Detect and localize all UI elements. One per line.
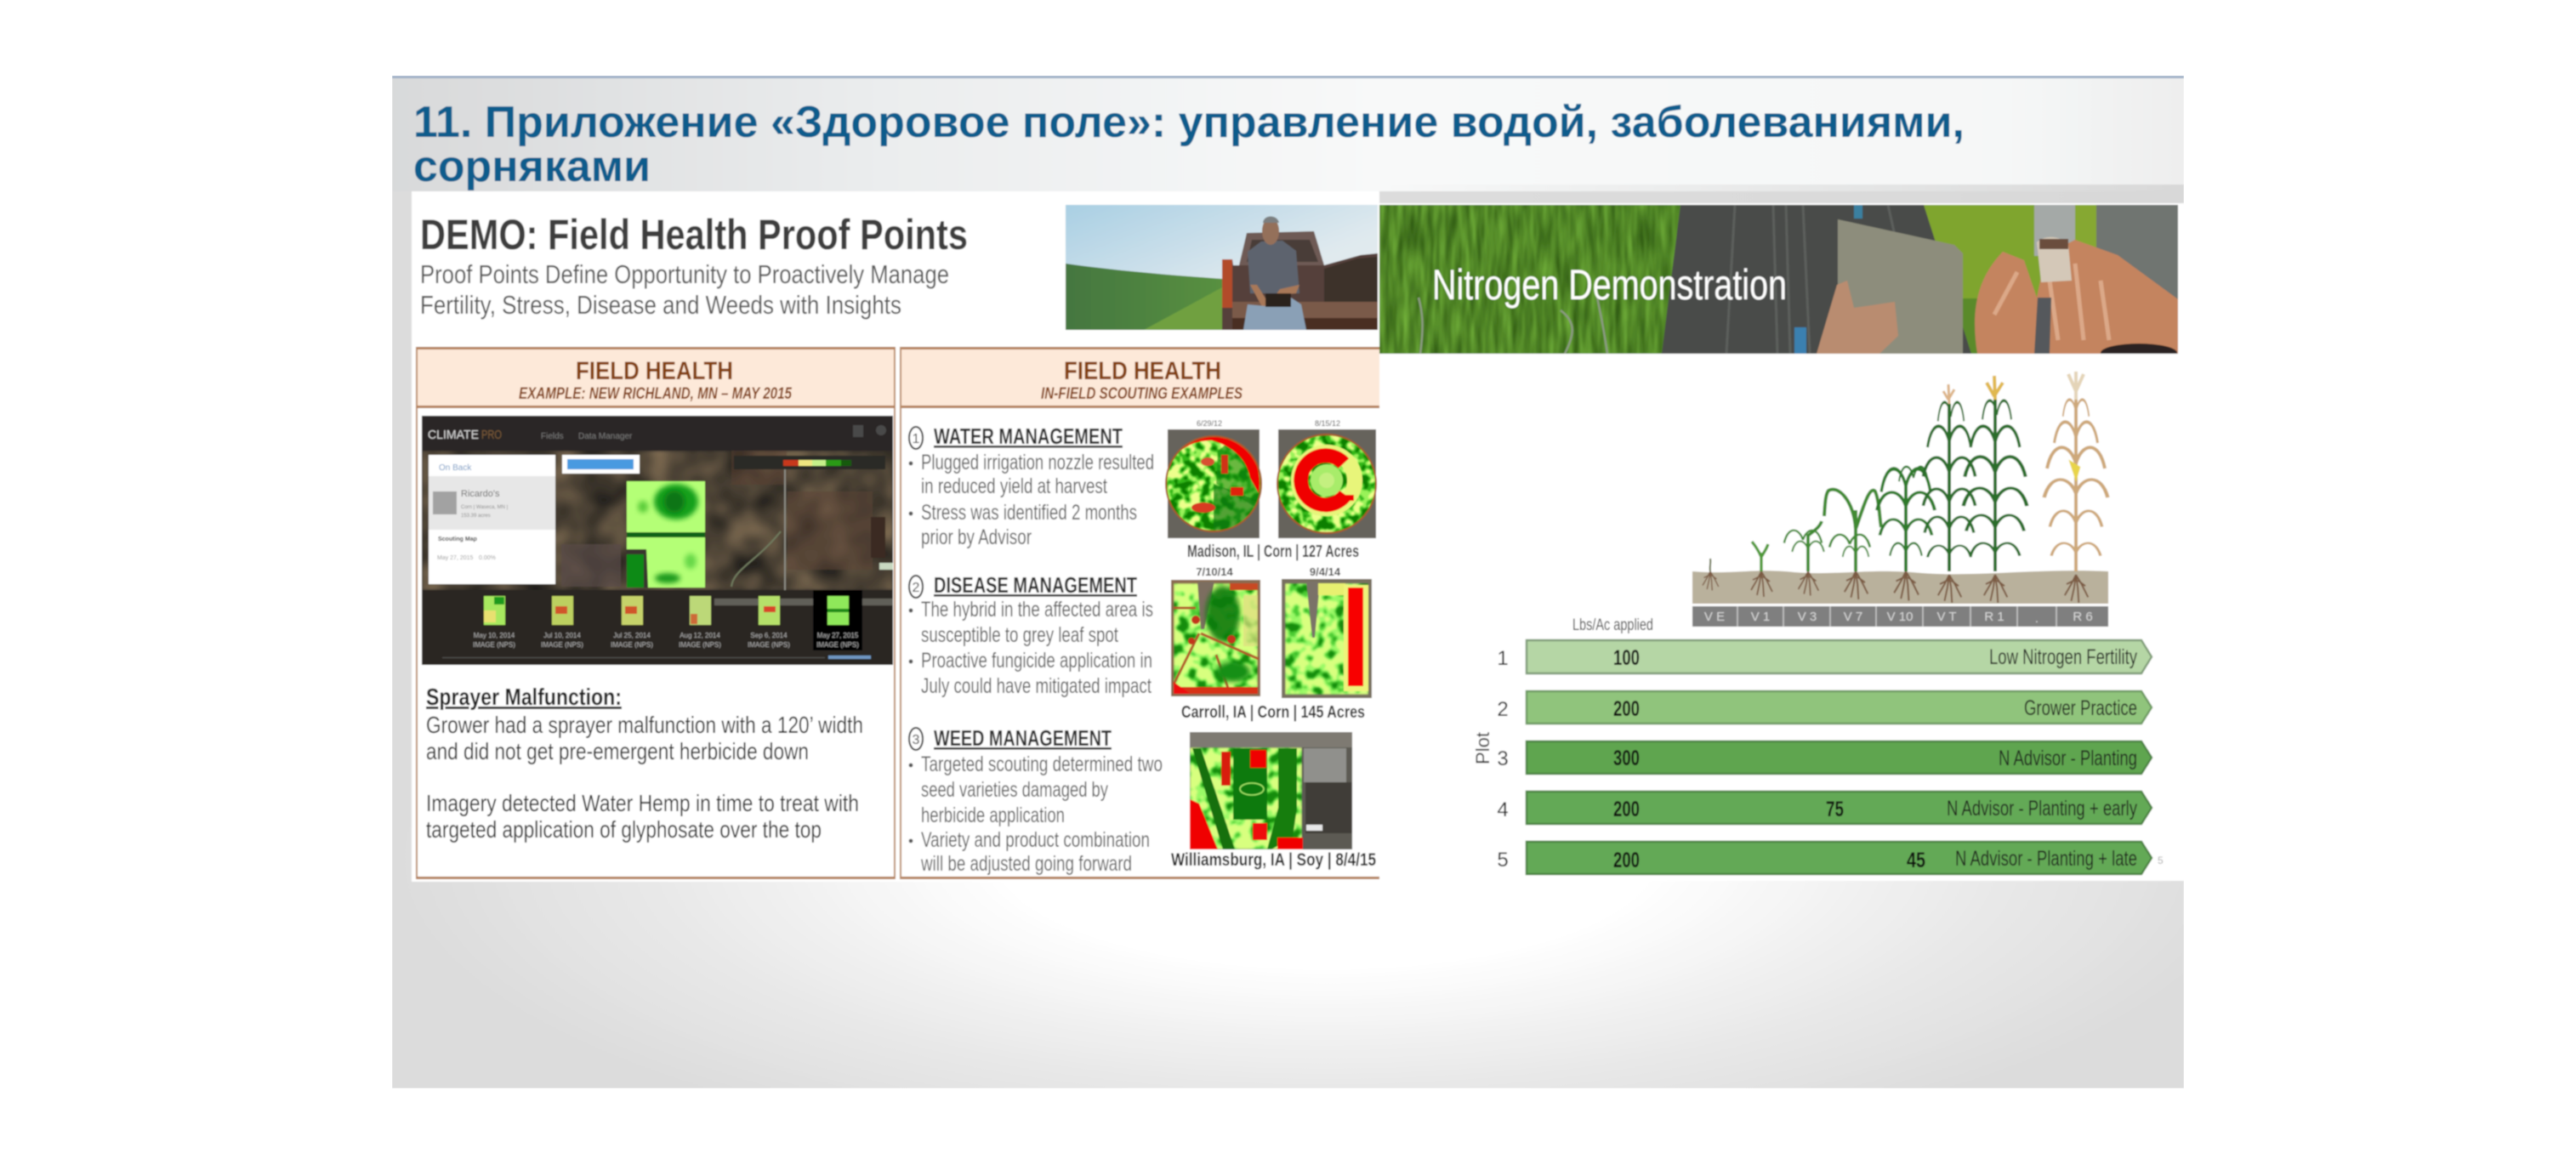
info card: May 27, 2015 [437,555,474,561]
demo subtitle [420,259,949,320]
growth stage scale [1692,606,2108,627]
info card: Ricardo's [461,489,500,499]
field health map [627,481,705,588]
plot row 3: N Advisor - Planting [1999,747,2137,770]
photo: farmer on truck [1066,205,1378,330]
thumbnail strip: IMAGE (NPS) [679,641,721,649]
panel subheading: EXAMPLE: NEW RICHLAND, MN – MAY 2015 [519,385,792,403]
panel: in-field scouting examples [900,347,1379,879]
demo subtitle: Proof Points Define Opportunity to Proactively Manage [420,259,949,289]
sprayer malfunction text: targeted application of glyphosate over the top [426,816,822,843]
water management text: WATER MANAGEMENT [934,423,1123,449]
plot row 5 [1497,842,2164,874]
map: carroll 9/4/14: 9/4/14 [1310,565,1341,578]
right image panel: nitrogen demonstration [1379,203,2184,881]
demo heading: DEMO: Field Health Proof Points [420,211,968,258]
plot row 3: 3 [1497,747,1509,770]
water management text: prior by Advisor [921,525,1032,549]
corn V1 [1752,542,1768,571]
weed management text: herbicide application [921,803,1065,827]
map: madison 6/29/12 [1165,419,1262,538]
caption: madison: Madison, IL | Corn | 127 Acres [1187,542,1359,561]
blue button [562,455,640,474]
weed management text: 3 [913,733,920,747]
map: carroll 9/4/14 [1282,565,1372,698]
screenshot: climate pro: Data Manager [578,432,633,441]
plot row 5: 200 [1613,849,1640,872]
sprayer malfunction text: and did not get pre-emergent herbicide down [426,738,809,764]
disease management text: Proactive fungicide application in [921,649,1152,673]
thumbnail strip [422,590,893,665]
disease management text: 2 [913,581,920,595]
plot row 1: 100 [1613,646,1640,670]
thumbnail strip: May 10, 2014 [474,632,515,639]
water management text: 1 [913,432,920,446]
corn growth stages illustration [1692,372,2108,604]
weed management text: Variety and product combination [921,828,1150,852]
disease management text: The hybrid in the affected area is [921,598,1153,622]
thumbnail strip: IMAGE (NPS) [748,641,790,649]
caption: williamsburg: Williamsburg, IA | Soy | 8/4/15 [1171,850,1376,870]
thumbnail strip: Jul 10, 2014 [543,632,581,639]
screenshot: climate pro [422,416,893,665]
water management text [909,423,1154,549]
map: madison 6/29/12: 6/29/12 [1197,419,1222,428]
thumbnail strip: IMAGE (NPS) [611,641,653,649]
corn VT [1923,384,1976,571]
disease management text: susceptible to grey leaf spot [921,623,1118,647]
map: williamsburg [1190,732,1352,849]
zoom controls [871,517,885,558]
roots [1703,571,2088,603]
plot row 4: 200 [1613,798,1640,821]
weed management text [909,725,1163,876]
weed management text: seed varieties damaged by [921,778,1108,802]
thumbnail strip: IMAGE (NPS) [473,641,515,649]
corn V10 [1877,467,1935,571]
thumbnail strip: Jul 25, 2014 [613,632,651,639]
growth stage scale: V 7 [1844,610,1862,624]
growth stage scale: R 6 [2073,610,2093,624]
plot row 5: 45 [1907,849,1925,872]
plot row 4: 4 [1497,798,1509,821]
slide [392,76,2184,1088]
plot row 1: 1 [1497,647,1509,670]
weed management text: will be adjusted going forward [920,852,1132,876]
info card: On Back [439,463,472,473]
corn VE [1709,559,1711,571]
sprayer malfunction text: Sprayer Malfunction: [426,684,622,710]
disease management text: DISEASE MANAGEMENT [934,572,1137,598]
slide background [392,76,2184,1088]
plot row 4: 75 [1826,798,1844,821]
plot row 2: Grower Practice [2024,696,2137,720]
demo subtitle: Fertility, Stress, Disease and Weeds with Insights [420,290,901,320]
disease management text [909,572,1153,698]
plot row 5: 5 [1497,849,1509,872]
panel heading: FIELD HEALTH [576,357,733,385]
growth stage scale: R 1 [1984,610,2005,624]
growth stage scale: V 3 [1798,610,1817,624]
sprayer malfunction text: Grower had a sprayer malfunction with a 120’ width [426,712,863,738]
map: carroll 7/10/14 [1171,565,1260,696]
growth stage scale: V 1 [1751,610,1770,624]
plot row 4 [1497,792,2152,824]
weed management text: Targeted scouting determined two [921,752,1163,776]
soil [1692,571,2108,604]
plot row 1 [1497,640,2152,673]
panel: field health example [417,347,895,879]
plot row 5: 5 [2158,855,2164,866]
left image panel: field health proof points [412,191,2184,882]
water management text: Plugged irrigation nozzle resulted [921,451,1154,474]
plot row 2: 200 [1613,697,1640,721]
title: сорняками [413,142,651,191]
plot row 1: Low Nitrogen Fertility [1989,645,2137,669]
caption: carroll: Carroll, IA | Corn | 145 Acres [1181,703,1365,722]
axis label: lbs/ac applied: Lbs/Ac applied [1572,616,1653,634]
screenshot: climate pro: PRO [481,428,502,442]
panel subheading: IN-FIELD SCOUTING EXAMPLES [1041,385,1243,403]
title [413,98,1965,191]
thumbnail strip: Sep 6, 2014 [750,632,788,639]
growth stage scale: V T [1936,610,1957,624]
growth stage scale: . [2035,611,2039,626]
thumbnail strip: Aug 12, 2014 [680,632,720,639]
plot row 2: 2 [1497,698,1509,721]
plot row 2 [1497,691,2152,724]
plot row 3: 300 [1613,747,1640,770]
thumbnail strip: IMAGE (NPS) [541,641,583,649]
growth stage scale: V E [1704,610,1725,624]
weed management text: WEED MANAGEMENT [934,725,1112,751]
title: 11. Приложение «Здоровое поле»: управление водой, заболеваниями, [413,98,1965,147]
map: madison 8/15/12 [1277,419,1377,538]
sprayer malfunction text [426,684,863,843]
plot row 5: N Advisor - Planting + late [1955,847,2137,871]
map: carroll 7/10/14: 7/10/14 [1196,565,1233,578]
corn R6 [2044,372,2107,571]
axis label: plot: Plot [1472,732,1493,764]
growth stage scale: V 10 [1887,610,1913,624]
panel heading: FIELD HEALTH [1064,357,1221,385]
info card [429,455,555,584]
plot row 4: N Advisor - Planting + early [1947,797,2137,820]
logo text: CLIMATE [428,428,479,442]
plot row 3 [1497,741,2152,774]
corn R1 [1964,376,2027,571]
water management text: Stress was identified 2 months [921,501,1137,525]
banner photo [1379,205,2178,362]
thumbnail strip: IMAGE (NPS) [816,641,859,649]
corn V3 [1784,521,1824,571]
sprayer malfunction text: Imagery detected Water Hemp in time to treat with [426,790,859,816]
corn V7 [1824,490,1881,571]
info card: 0.00% [479,555,496,561]
disease management text: July could have mitigated impact [921,674,1152,698]
banner title: Nitrogen Demonstration [1432,261,1787,309]
screenshot: climate pro: Fields [541,432,564,441]
thumbnail strip: May 27, 2015 [817,632,859,639]
info card: Scouting Map [438,537,477,542]
info card: 153.39 acres [461,514,491,519]
water management text: in reduced yield at harvest [921,474,1107,498]
info card: Corn | Waseca, MN | [461,505,509,510]
legend strip [734,456,885,469]
map: madison 8/15/12: 8/15/12 [1315,419,1340,428]
